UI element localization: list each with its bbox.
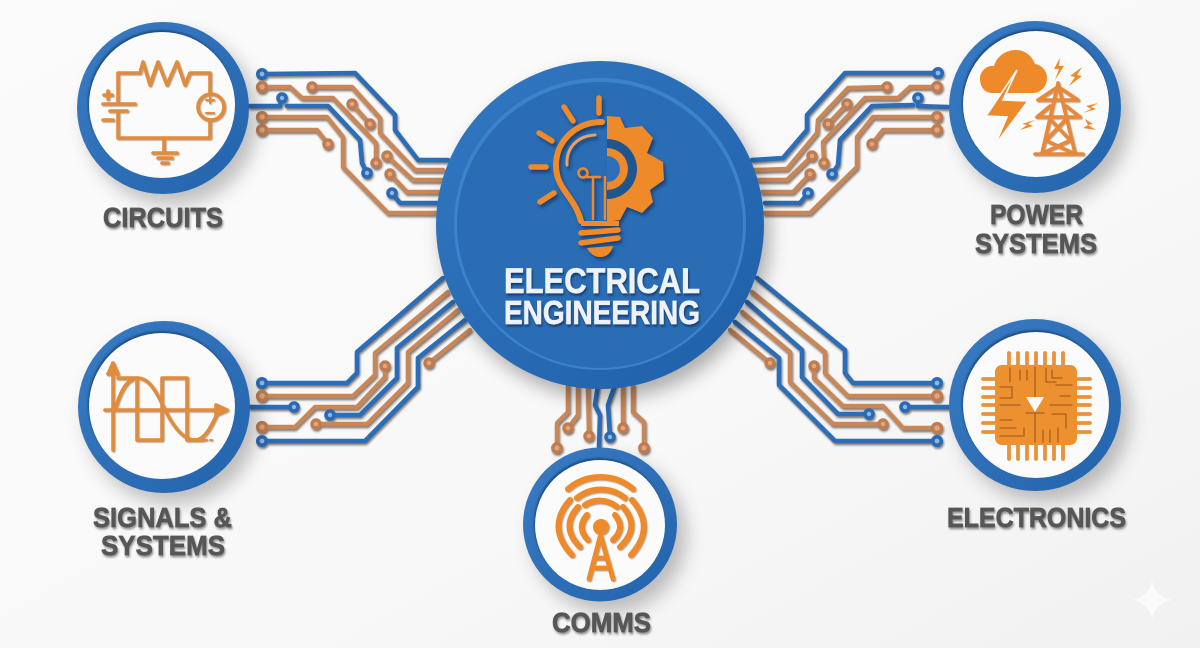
icon: waveform graph	[105, 363, 227, 450]
disc: electronics	[963, 332, 1109, 478]
ring: signals	[78, 321, 250, 493]
ring: power systems	[949, 21, 1121, 193]
ring: circuits	[77, 22, 249, 194]
traces: power systems	[752, 69, 948, 213]
heading: power systems: POWER	[990, 199, 1083, 230]
panel: electronics	[730, 278, 1126, 533]
traces: comms	[553, 385, 648, 452]
hub ridge	[454, 78, 746, 370]
title: ELECTRICAL	[504, 262, 700, 301]
panel: power systems	[752, 21, 1121, 259]
traces: circuits	[250, 70, 448, 213]
disc: power systems	[963, 31, 1109, 177]
icon: lightbulb and gear	[531, 98, 664, 257]
heading: electronics: ELECTRONICS	[947, 502, 1126, 533]
ring: electronics	[949, 319, 1121, 491]
traces: signals	[250, 278, 470, 445]
heading: power systems: SYSTEMS	[975, 228, 1097, 259]
heading: signals and systems: SIGNALS &	[93, 502, 232, 533]
icon: microchip	[983, 353, 1090, 459]
title	[504, 262, 700, 331]
traces: electronics	[730, 278, 948, 445]
panel: comms	[523, 385, 677, 638]
icon: antenna tower	[558, 477, 644, 579]
icon: circuit diagram	[103, 62, 224, 163]
ring: comms	[523, 448, 677, 602]
heading: circuits: CIRCUITS	[103, 202, 223, 233]
heading: signals and systems: SYSTEMS	[101, 530, 225, 561]
icon: small sparks	[1020, 58, 1098, 130]
hub inner disc	[457, 82, 743, 368]
panel: signals and systems	[78, 278, 470, 561]
hub outer disc	[436, 61, 764, 389]
panel: central hub	[436, 61, 764, 389]
disc: circuits	[89, 32, 235, 178]
panel: circuits	[77, 22, 448, 233]
heading: power systems	[975, 199, 1097, 259]
disc: signals	[89, 333, 235, 479]
icon: storm cloud and lightning	[980, 50, 1047, 145]
title: ENGINEERING	[504, 294, 700, 331]
disc: comms	[535, 460, 665, 590]
heading: comms: COMMS	[552, 607, 651, 638]
icon: transmission tower	[1035, 83, 1083, 154]
heading: signals and systems	[93, 502, 232, 561]
icon: sparkle watermark	[1132, 580, 1172, 620]
